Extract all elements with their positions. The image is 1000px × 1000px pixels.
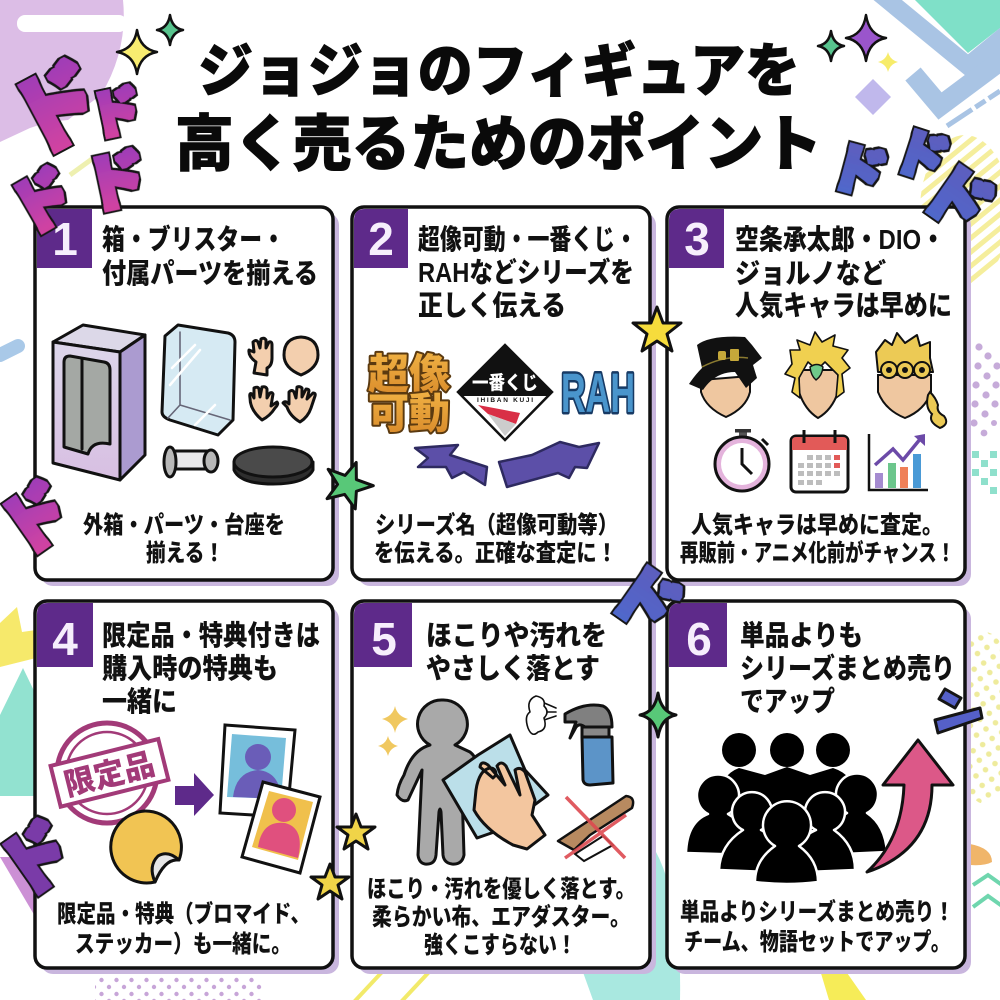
number badge 4 xyxy=(37,603,93,667)
icon: wiping hand xyxy=(474,763,545,849)
logo: 超像可動: 可動 xyxy=(368,390,450,437)
caption 4 xyxy=(57,900,310,958)
panel 3: popular characters xyxy=(667,207,971,586)
heading 6: シリーズまとめ売り xyxy=(740,652,955,684)
icon: calendar xyxy=(791,430,848,492)
caption 4: 限定品・特典（ブロマイド、 xyxy=(57,900,310,928)
logo: 超像可動: 超像 xyxy=(368,351,450,398)
logo: 一番くじ xyxy=(458,345,552,440)
caption 5: 強くこすらない！ xyxy=(424,932,576,959)
icon: sticker photo xyxy=(242,782,320,873)
heading 6: でアップ xyxy=(740,686,835,717)
heading 6 xyxy=(740,620,955,717)
number badge 2 xyxy=(354,209,408,268)
title: ジョジョのフィギュアを xyxy=(198,39,800,104)
logo: 超像可動 xyxy=(368,351,450,437)
number badge 6 xyxy=(669,603,727,667)
sparkles near title xyxy=(117,15,886,74)
number badge 5: 5 xyxy=(371,613,397,665)
number badge 1: 1 xyxy=(52,213,78,265)
sound effects: pink ド: ド xyxy=(84,81,147,148)
icon: sparkles xyxy=(378,706,408,756)
caption 2 xyxy=(374,511,618,567)
icon: crossed-out brush xyxy=(558,796,633,861)
logo: RAH: RAH xyxy=(561,361,635,424)
icon: up arrow xyxy=(867,740,953,872)
heading 3: 空条承太郎・DIO・ xyxy=(735,224,945,255)
icon: rising chart xyxy=(869,434,928,490)
icon: stopwatch xyxy=(715,429,769,491)
heading 5 xyxy=(426,620,607,684)
sound effects: blue ド: ド xyxy=(824,136,892,208)
caption 5: ほこり・汚れを優しく落とす。 xyxy=(367,876,635,903)
title: 高く売るためのポイント xyxy=(175,110,822,178)
sound effects: blue ド: ド xyxy=(596,550,692,648)
heading 3: 人気キャラは早めに xyxy=(735,290,952,321)
icon: bromide photo xyxy=(220,725,295,817)
star accents xyxy=(311,307,681,899)
sound effects: pink ド: ド xyxy=(78,143,153,223)
heading 4: 一緒に xyxy=(102,686,177,717)
logo: 一番くじ: 一番くじ xyxy=(472,372,538,394)
caption 3: 人気キャラは早めに査定。 xyxy=(691,511,943,539)
caption 4: ステッカー）も一緒に。 xyxy=(75,931,291,958)
icon: stand arm xyxy=(164,447,218,477)
caption 2: を伝える。正確な査定に！ xyxy=(374,540,617,567)
logo: bat wing xyxy=(415,442,599,487)
panel 6: sets xyxy=(667,601,971,974)
number badge 6: 6 xyxy=(686,613,712,665)
heading 2: 正しく伝える xyxy=(418,290,566,321)
icon: Jotaro head xyxy=(689,337,762,417)
sound effects: pink ド: ド xyxy=(0,158,87,249)
icon: DIO head xyxy=(785,332,850,418)
panel 1: box and parts xyxy=(35,207,339,586)
sound effects: pink ド xyxy=(0,46,153,571)
number badge 3: 3 xyxy=(684,213,710,265)
caption 5 xyxy=(367,876,635,959)
panel 2: series names xyxy=(352,207,656,586)
icon: sticker xyxy=(111,811,181,883)
heading 4: 購入時の特典も xyxy=(102,653,278,684)
icon: gray figure xyxy=(397,700,482,864)
number badge 1 xyxy=(37,209,92,268)
sound effect: blue dashes xyxy=(935,689,982,733)
heading 1 xyxy=(102,223,318,289)
heading 4: 限定品・特典付きは xyxy=(102,620,320,651)
number badge 4: 4 xyxy=(52,613,78,665)
caption 6 xyxy=(680,898,954,956)
heading 1: 箱・ブリスター・ xyxy=(102,223,285,255)
arrow to photos xyxy=(175,773,214,816)
heading 5: ほこりや汚れを xyxy=(426,620,607,651)
icon: Giorno head xyxy=(876,333,946,428)
caption 1: 外箱・パーツ・台座を xyxy=(83,511,285,539)
sound effects: blue ド: ド xyxy=(887,121,954,192)
caption 1 xyxy=(83,511,285,567)
panel 4: limited items xyxy=(35,601,339,974)
icon: display base xyxy=(234,447,313,484)
caption 5: 柔らかい布、エアダスター。 xyxy=(372,903,630,931)
heading 3 xyxy=(735,224,952,321)
icon: blue cloth xyxy=(443,735,548,838)
caption 3 xyxy=(680,511,955,567)
heading 5: やさしく落とす xyxy=(426,653,600,684)
number badge 3 xyxy=(669,209,724,268)
caption 2: シリーズ名（超像可動等） xyxy=(375,511,618,539)
caption 1: 揃える！ xyxy=(146,540,224,567)
heading 2: RAHなどシリーズを xyxy=(418,256,634,288)
icon: spray bottle xyxy=(526,696,613,785)
sound effects: blue ド xyxy=(596,121,1000,648)
icon: limited stamp xyxy=(51,723,168,823)
icon: team silhouettes xyxy=(686,733,887,884)
heading 4 xyxy=(102,620,320,717)
heading 6: 単品よりも xyxy=(740,620,863,651)
number badge 5 xyxy=(354,603,412,667)
icon: limited stamp: 限定品 xyxy=(60,746,158,803)
number badge 2: 2 xyxy=(368,213,394,265)
heading 1: 付属パーツを揃える xyxy=(102,258,318,289)
icon: hands and head parts xyxy=(249,337,318,422)
panel 5: gentle cleaning xyxy=(352,601,656,974)
heading 3: ジョルノなど xyxy=(735,258,886,289)
icon: blister xyxy=(162,325,235,435)
title xyxy=(175,39,822,178)
heading 2 xyxy=(418,224,637,321)
icon: outer box xyxy=(53,325,145,480)
heading 2: 超像可動・一番くじ・ xyxy=(418,224,637,255)
logo: 一番くじ: IHIBAN KUJI xyxy=(477,397,533,404)
